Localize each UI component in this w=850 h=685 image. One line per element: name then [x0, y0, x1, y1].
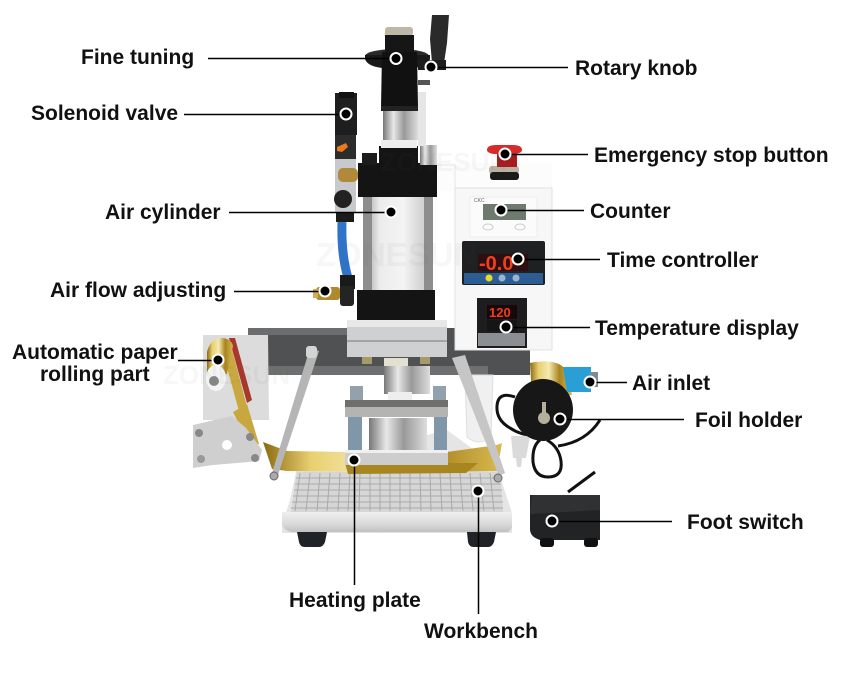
label: Workbench: Workbench — [424, 620, 538, 643]
machine photo illustration — [163, 15, 600, 547]
label: Air cylinder — [105, 201, 396, 224]
control box — [455, 188, 552, 350]
control box: CKC — [474, 198, 485, 204]
white rear panel — [380, 163, 552, 191]
watermark: ZONESUN — [381, 147, 508, 177]
label: Foil holder: Foil holder — [695, 409, 802, 432]
watermark — [163, 147, 508, 390]
control box: 120 — [489, 305, 511, 320]
label: Counter: Counter — [590, 200, 670, 223]
emergency stop button — [487, 145, 522, 180]
gold foil strip — [263, 442, 502, 474]
label: Solenoid valve — [31, 102, 352, 125]
label: Air flow adjusting: Air flow adjusting — [50, 279, 226, 302]
label: Foil holder — [554, 409, 802, 432]
label: Rotary knob — [426, 57, 698, 80]
support arm — [248, 328, 530, 375]
label: Time controller — [512, 249, 758, 272]
power cable — [497, 395, 600, 492]
air filter behind arm — [465, 375, 530, 467]
label: Foot switch — [546, 511, 804, 534]
label: Automatic paper rolling part — [12, 341, 224, 386]
label: Temperature display — [500, 317, 799, 340]
hinge post — [384, 358, 430, 402]
label: Solenoid valve: Solenoid valve — [31, 102, 178, 125]
label: Automatic paper rolling part: Automatic paper — [12, 341, 178, 364]
label: Air inlet: Air inlet — [632, 372, 710, 395]
label: Automatic paper rolling part: rolling part — [40, 363, 150, 386]
label: Air inlet — [584, 372, 710, 395]
watermark: ZONESUN — [316, 236, 477, 273]
label: Foot switch: Foot switch — [687, 511, 804, 534]
air inlet connector — [563, 367, 598, 392]
solenoid valve — [334, 92, 358, 222]
foot switch — [530, 495, 600, 547]
fine tuning knob and rotary handle — [365, 15, 449, 111]
label: Fine tuning — [81, 46, 402, 69]
label: Rotary knob: Rotary knob — [575, 57, 698, 80]
label: Air cylinder: Air cylinder — [105, 201, 221, 224]
label: Workbench — [424, 486, 538, 643]
label: Emergency stop button: Emergency stop button — [594, 144, 829, 167]
label: Heating plate — [289, 454, 421, 612]
label: Time controller: Time controller — [607, 249, 758, 272]
label: Air flow adjusting — [50, 279, 330, 302]
label: Fine tuning: Fine tuning — [81, 46, 194, 69]
side rods — [270, 346, 505, 482]
air cylinder assembly — [347, 92, 447, 364]
label: Temperature display: Temperature display — [595, 317, 799, 340]
label: Counter — [496, 200, 670, 223]
workbench — [282, 430, 512, 547]
foil holder — [513, 361, 573, 441]
watermark: ZONESUN — [163, 360, 290, 390]
label: Heating plate: Heating plate — [289, 589, 421, 612]
control box: -0.0 — [479, 253, 513, 275]
heating plate assembly — [345, 386, 448, 465]
air tube and flow valve — [313, 222, 355, 306]
automatic paper rolling part — [193, 335, 269, 468]
